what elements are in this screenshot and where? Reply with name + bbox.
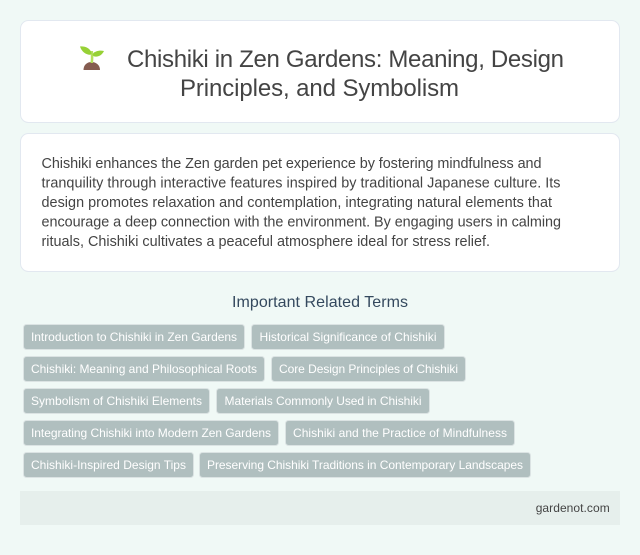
footer xyxy=(20,491,620,525)
tag xyxy=(272,356,466,382)
tag: Symbolism of Chishiki Elements xyxy=(31,394,202,408)
tag xyxy=(216,388,430,414)
description text: rituals, Chishiki cultivates a peaceful atmosphere ideal for stress relief. xyxy=(42,234,490,250)
tag xyxy=(24,420,278,446)
tag: Materials Commonly Used in Chishiki xyxy=(224,394,422,408)
tag: Core Design Principles of Chishiki xyxy=(279,362,458,376)
description text: tranquility through interactive features inspired by traditional Japanese culture. Its xyxy=(42,176,560,192)
icon: sprout xyxy=(80,46,104,70)
tag xyxy=(24,452,194,478)
description text: encourage a deep connection with the environment. By engaging users in calming xyxy=(42,214,561,230)
tag: Integrating Chishiki into Modern Zen Gardens xyxy=(31,426,271,440)
title: Chishiki in Zen Gardens: Meaning, Design xyxy=(127,46,564,73)
tag: Preserving Chishiki Traditions in Contemporary Landscapes xyxy=(207,458,523,472)
footer source text: gardenot.com xyxy=(536,501,610,515)
tag xyxy=(200,452,530,478)
description text: design promotes relaxation and contemplation, integrating natural elements that xyxy=(42,195,552,211)
panel: description xyxy=(20,134,620,272)
tag xyxy=(286,420,514,446)
tag xyxy=(252,324,444,350)
tag: Chishiki: Meaning and Philosophical Roots xyxy=(31,362,257,376)
tag xyxy=(24,356,264,382)
panel: header xyxy=(20,20,620,122)
tag: Chishiki and the Practice of Mindfulness xyxy=(293,426,507,440)
title: Principles, and Symbolism xyxy=(180,75,459,102)
tag: Chishiki-Inspired Design Tips xyxy=(31,458,186,472)
tags: related terms xyxy=(24,324,530,478)
description text: Chishiki enhances the Zen garden pet experience by fostering mindfulness and xyxy=(42,156,542,172)
heading: related terms: Important Related Terms xyxy=(232,294,408,311)
tag xyxy=(24,324,244,350)
tag: Historical Significance of Chishiki xyxy=(260,330,436,344)
tag xyxy=(24,388,210,414)
tag: Introduction to Chishiki in Zen Gardens xyxy=(31,330,237,344)
